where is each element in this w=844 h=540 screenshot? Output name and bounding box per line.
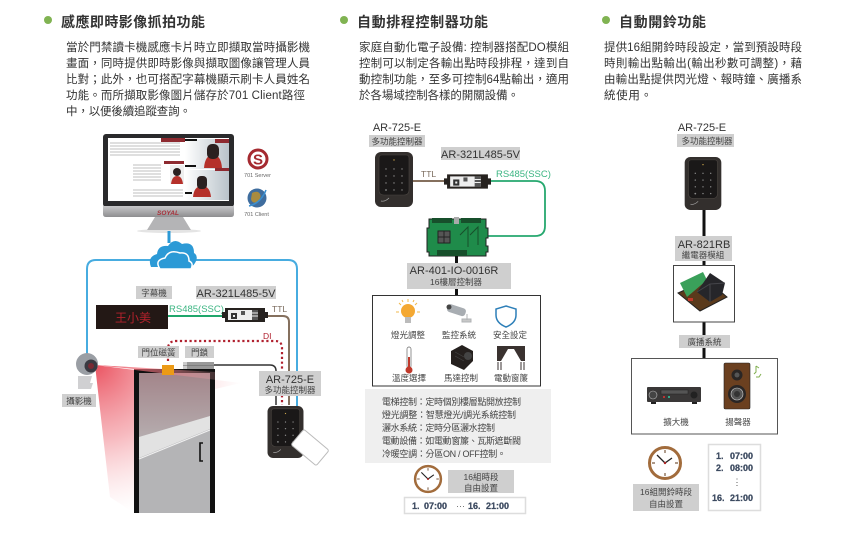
label: caption machine (136, 286, 172, 299)
time list: 21:00 (730, 493, 753, 503)
label: 16 bell slots: 自由設置 (649, 499, 683, 509)
text block: auto bell description: 統使用。 (604, 88, 652, 102)
icon: thermometer: 溫度選擇 (392, 373, 426, 383)
connector line (702, 205, 706, 358)
text block: scheduling description (359, 40, 570, 102)
icon: shield (493, 306, 527, 340)
door lock body (183, 362, 214, 369)
line: lock wire (214, 365, 276, 405)
label: 16 time slots: 16組時段 (464, 472, 499, 482)
icon: reader (375, 152, 413, 207)
icon: speaker (724, 363, 751, 427)
text block: scheduling description: 控制可以制定各輸出點時段排程，達到自 (359, 56, 569, 70)
time list: 1. (412, 501, 420, 511)
icon: surveillance camera: 監控系統 (442, 330, 476, 340)
time list: 07:00 (424, 501, 447, 511)
label: broadcast system: 廣播系統 (687, 337, 722, 347)
icon: light: 燈光調整 (391, 330, 425, 340)
LED caption display (96, 305, 168, 329)
text block: camera capture description: 當於門禁讀卡機感應卡片時立即擷取當時攝影機 (66, 40, 310, 54)
label: AR-321L485-5V: AR-321L485-5V (197, 288, 276, 300)
icon: curtains: 電動窗簾 (494, 373, 528, 383)
icon: shield: 安全設定 (493, 330, 527, 340)
panel: control list: 灑水系統：定時分區灑水控制 (382, 422, 495, 433)
text block: camera capture description (66, 40, 310, 118)
text block: camera capture description: 比對；此外，也可搭配字幕機顯示刷卡人員姓名 (66, 72, 310, 86)
label: 16 time slots: 自由設置 (464, 483, 498, 493)
icon: monitor with 701 software (103, 134, 234, 233)
text block: camera capture description: 功能。而所擷取影像圖片儲存於701 Client路徑 (66, 88, 306, 102)
line: DI red dotted: DI (263, 331, 272, 341)
panel: relay module (674, 266, 734, 322)
time list: 21:00 (486, 501, 509, 511)
line: TTL (413, 169, 446, 181)
panel: control list: 冷暖空調：分區ON / OFF控制。 (382, 448, 506, 459)
text block: auto bell description (604, 40, 802, 102)
text block: scheduling description: 於各場域控制各樣的開關設備。 (359, 88, 519, 102)
text block: camera capture description: 中，以便後續追蹤查詢。 (66, 104, 191, 118)
time list: 1. (716, 451, 724, 461)
icon: motor: 馬達控制 (444, 373, 478, 383)
time list (708, 444, 760, 510)
icon: converter module (222, 308, 268, 322)
icon: 701 Client: 701 Client (244, 212, 269, 218)
panel: automatic bell function (602, 14, 802, 511)
label: AR-401-IO-0016R (407, 263, 511, 289)
panel: camera capture function (44, 14, 329, 513)
label: door lock: 門鎖 (191, 348, 208, 358)
icon: amplifier: 擴大機 (663, 417, 689, 427)
icon: curtains (494, 346, 528, 383)
icon: 701 Client (244, 188, 269, 218)
panel: control list: 電梯控制：定時個別樓層點開放控制 (382, 396, 521, 407)
label: camera: 攝影機 (66, 396, 92, 406)
label: 16 bell slots: 16組開鈴時段 (640, 487, 692, 497)
label: AR-321L485-5V: AR-321L485-5V (441, 149, 521, 161)
text block: auto bell description: 時則輸出點輸出(輸出秒數可調整)，藉 (604, 56, 802, 70)
label: 16 time slots (448, 470, 514, 493)
heading: scheduling: 自動排程控制器功能 (357, 14, 488, 30)
icon: cloud network (150, 231, 197, 269)
label: AR-401-IO-0016R: 16樓層控制器 (430, 277, 482, 287)
icon: light (391, 299, 425, 340)
text block: auto bell description: 提供16組開鈴時段設定，當到預設時段 (604, 40, 802, 54)
text block: scheduling description: 動控制功能，至多可控制64點輸出，適用 (359, 72, 569, 86)
label: broadcast system (679, 335, 730, 348)
panel: control list: 電動設備：如電動窗簾、瓦斯遮斷閥 (382, 435, 521, 446)
icon: controller board (427, 217, 488, 256)
network line: blue loop (87, 260, 297, 408)
panel: control list (365, 389, 551, 463)
label: camera (62, 394, 96, 407)
time list: 08:00 (730, 463, 753, 473)
label: door sensor (138, 346, 179, 358)
time list: ⋮ (732, 477, 742, 487)
line: TTL: TTL (272, 304, 287, 314)
label: multi-function controller (677, 134, 734, 147)
time list: 16. (468, 501, 481, 511)
time list: 16. (712, 493, 725, 503)
label: AR-725-E: AR-725-E (373, 122, 421, 134)
label: AR-725-E controller: 多功能控制器 (264, 385, 316, 395)
icon: reader (685, 157, 721, 210)
label: door lock (185, 346, 214, 358)
time list (404, 498, 526, 514)
icon: 701 Server: S (253, 152, 263, 168)
icon: motor (444, 345, 478, 383)
icon: clock (415, 466, 441, 492)
time list: ··· (456, 501, 465, 511)
label: AR-821RB: 繼電器模組 (682, 250, 725, 260)
label: door sensor: 門位磁簧 (141, 348, 176, 358)
line: RS485 green: RS485(SSC) (496, 169, 551, 180)
text block: auto bell description: 由輸出點提供閃光燈、報時鐘、廣播系 (604, 72, 802, 86)
icon: reader (268, 406, 303, 458)
time list: 2. (716, 463, 724, 473)
label: AR-821RB: AR-821RB (678, 239, 730, 251)
icon: surveillance camera (442, 303, 476, 340)
icon: converter module (444, 174, 491, 189)
door (134, 369, 215, 513)
heading: auto bell: 自動開鈴功能 (619, 14, 706, 30)
text block: scheduling description: 家庭自動化電子設備: 控制器搭配DO模組 (359, 40, 570, 54)
label: AR-821RB (675, 236, 732, 261)
label: AR-401-IO-0016R: AR-401-IO-0016R (410, 265, 498, 277)
label: multi-function controller: 多功能控制器 (681, 136, 733, 146)
panel: scheduling controller function (340, 14, 570, 514)
icon: monitor with 701 software: SOYAL (157, 210, 179, 217)
text block: camera capture description: 畫面，同時提供即時影像與擷取圖像讓管理人員 (66, 56, 310, 70)
line: DI red dotted (168, 331, 282, 405)
icon: thermometer (392, 347, 426, 383)
heading: camera capture: 感應即時影像抓拍功能 (61, 14, 205, 30)
icon: amplifier (647, 387, 701, 427)
icon: clock (650, 448, 680, 478)
label: multi-function controller: 多功能控制器 (371, 136, 423, 146)
line: RS485 green (486, 169, 551, 236)
LED caption display: 王小美 (115, 311, 151, 325)
light beam: camera view (95, 365, 241, 513)
label: AR-725-E controller (259, 371, 321, 396)
icon: speaker: 揚聲器 (725, 417, 751, 427)
label: caption machine: 字幕機 (141, 288, 167, 298)
label: AR-725-E: AR-725-E (678, 122, 726, 134)
door sensor magnet (162, 365, 174, 375)
icon: music notes (754, 366, 761, 377)
panel: control list: 燈光調整：智慧燈光/調光系統控制 (382, 409, 516, 420)
line: RS485 green: RS485(SSC) (169, 304, 224, 315)
connector line (455, 256, 458, 295)
line: TTL (268, 304, 289, 405)
label: AR-725-E controller: AR-725-E (266, 374, 314, 386)
panel: broadcast devices (632, 358, 778, 434)
line: TTL: TTL (421, 169, 436, 179)
time list: 07:00 (730, 451, 753, 461)
panel: controlled devices (372, 296, 540, 386)
icon: access card (291, 429, 329, 466)
icon: security camera (76, 353, 98, 389)
icon: 701 Server: 701 Server (244, 173, 271, 179)
icon: 701 Server (244, 150, 271, 179)
label: 16 bell slots (633, 484, 699, 511)
